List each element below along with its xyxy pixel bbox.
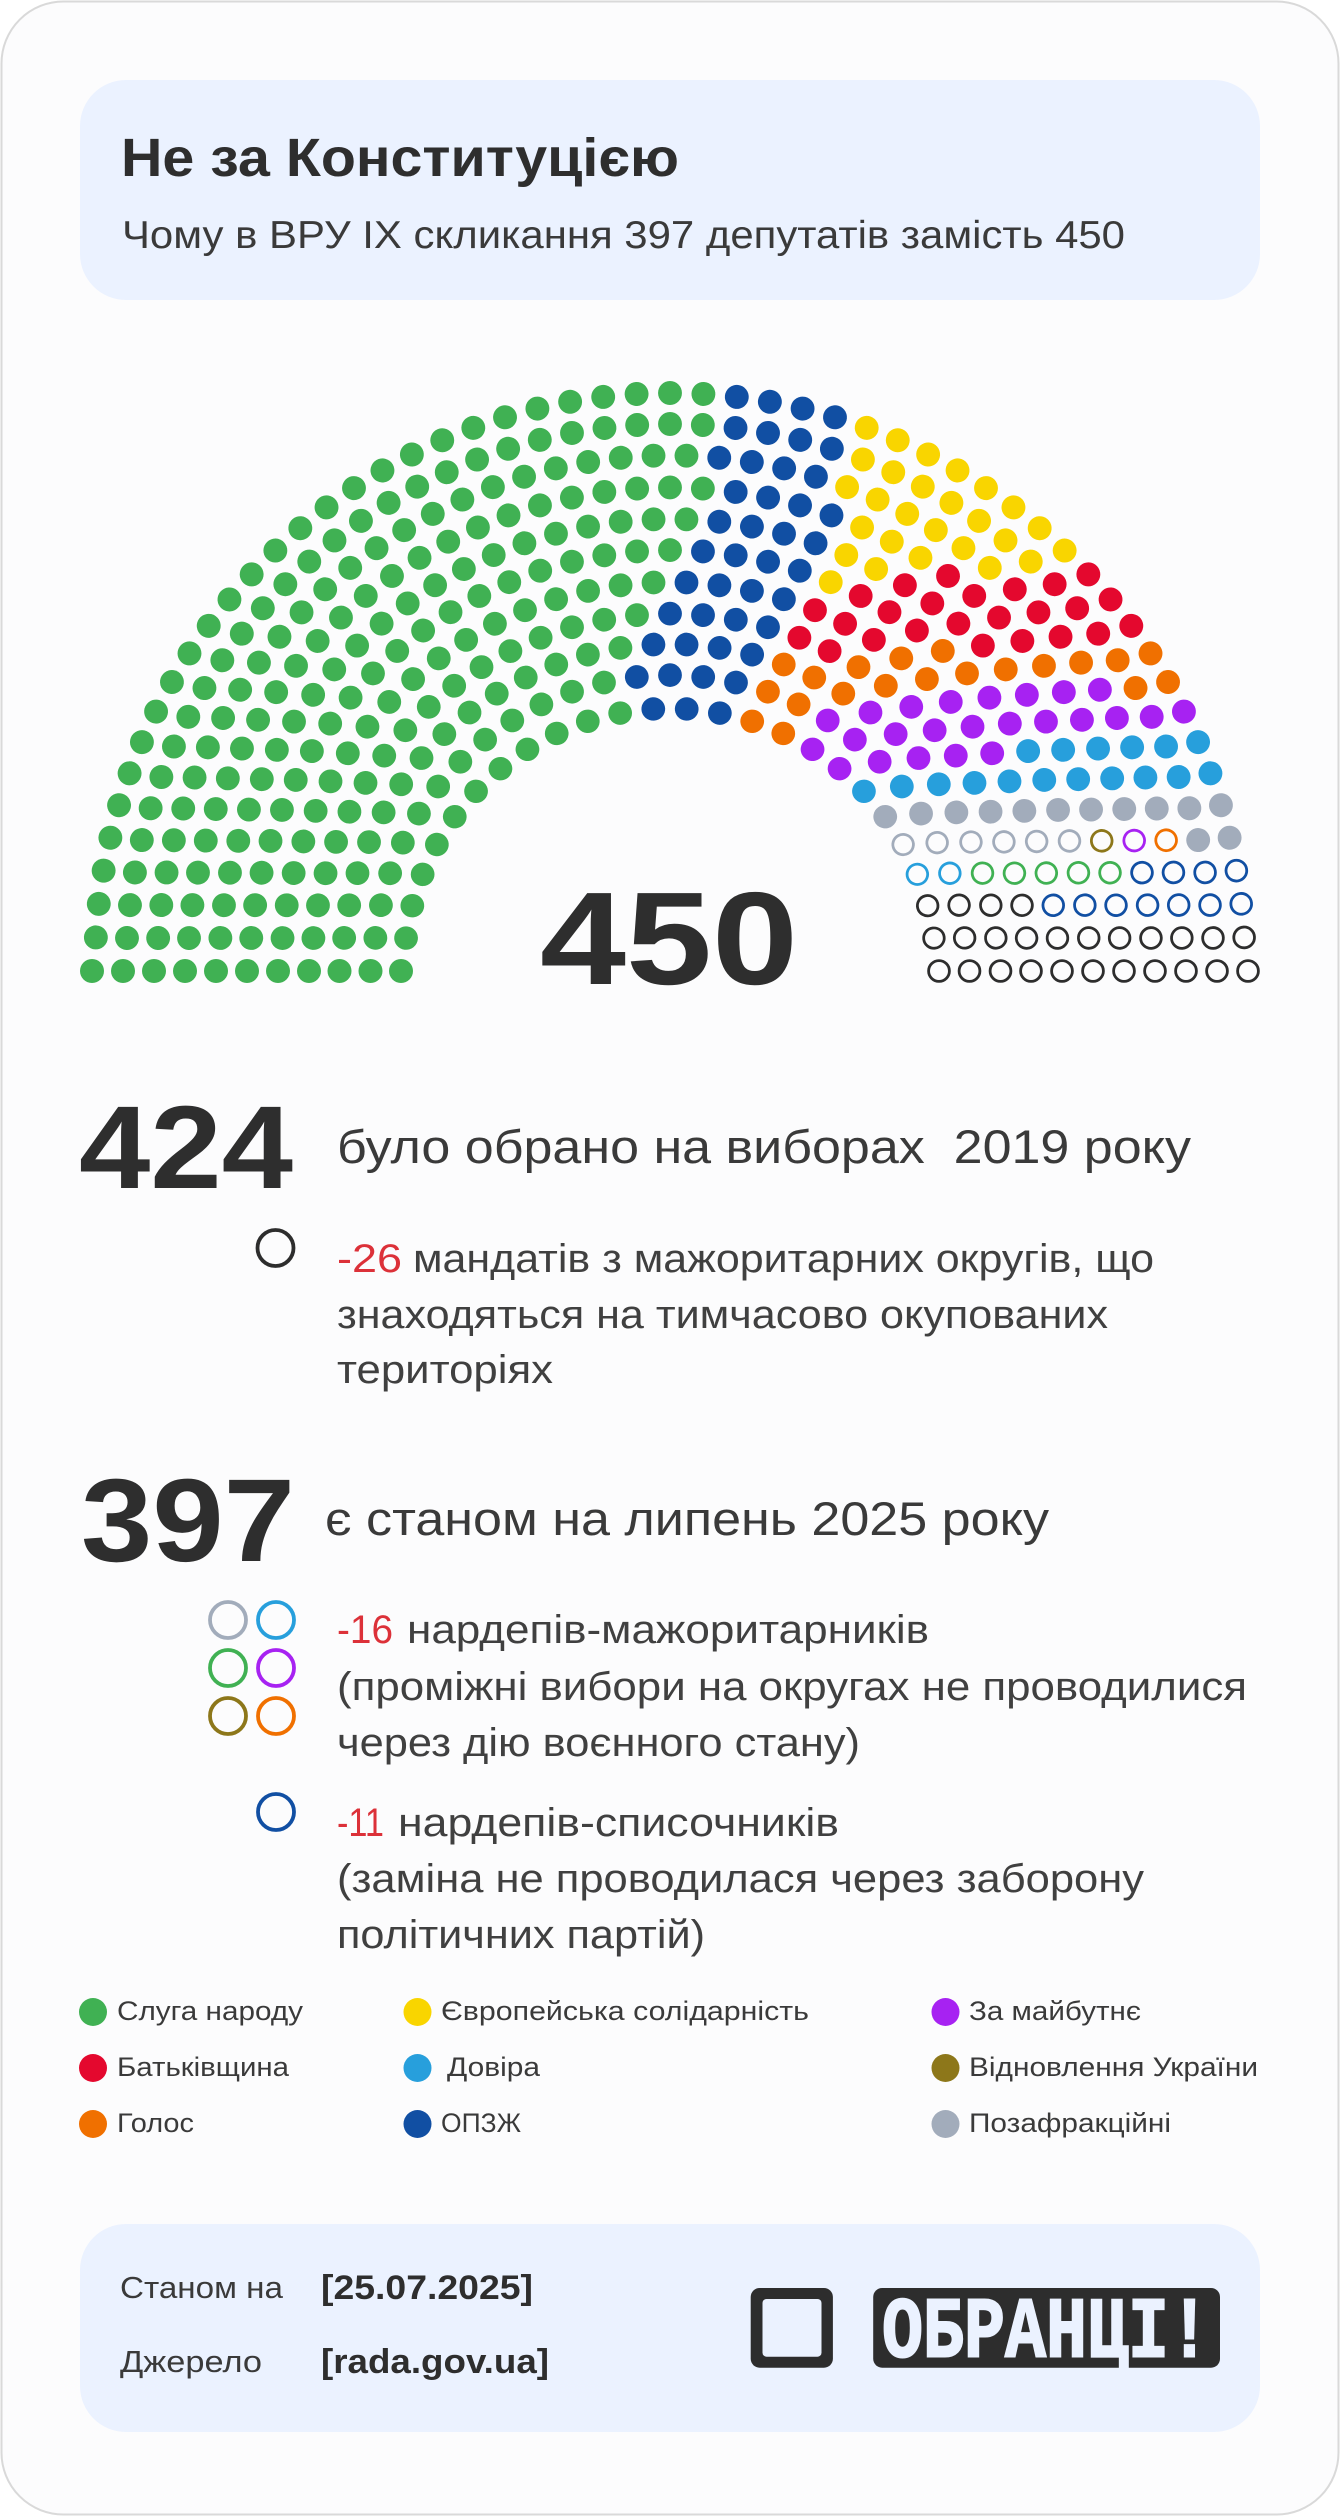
legend item: Голос	[79, 2108, 194, 2138]
vacant seats: нардепи-списочники	[1041, 859, 1253, 917]
note: minus 11: нардепів-списочників	[398, 1801, 839, 1845]
seats: Слуга народу	[80, 381, 716, 983]
section: 424 elected	[79, 1082, 1192, 1392]
note: minus 16: через дію воєнного стану)	[337, 1721, 860, 1765]
seats: За майбутнє	[796, 673, 1200, 785]
legend item: Батьківщина: Батьківщина	[117, 2052, 290, 2082]
footer: date label: Станом на	[120, 2270, 284, 2305]
vacant seat: За майбутнє	[1121, 828, 1147, 853]
legend item: ОПЗЖ: ОПЗЖ	[441, 2108, 521, 2138]
legend item: Позафракційні: Позафракційні	[969, 2108, 1171, 2138]
heading 397: є станом на липень 2025 року	[325, 1492, 1050, 1545]
vacant seats: Слуга народу	[970, 860, 1122, 886]
seats: Голос	[737, 634, 1184, 749]
footer: source value: [rada.gov.ua]	[321, 2343, 549, 2381]
logo: square mark	[751, 2288, 833, 2368]
note: minus 16: нардепів-мажоритарників	[407, 1608, 929, 1652]
vacant seats: позафракційні	[889, 828, 1082, 858]
vacant seat: Голос	[1154, 828, 1179, 853]
footer: source label: Джерело	[120, 2344, 262, 2379]
number 397: 397	[81, 1455, 295, 1587]
number 424: 424	[79, 1082, 293, 1214]
title: Не за Конституцією	[121, 128, 679, 188]
seats: Довіра	[847, 726, 1226, 808]
vacant seats: окуповані округи	[915, 893, 1258, 981]
legend item: Слуга народу: Слуга народу	[117, 1996, 304, 2026]
note: minus 26	[337, 1237, 1154, 1392]
legend item: ОПЗЖ	[404, 2108, 521, 2138]
parliament seat chart	[80, 381, 1258, 1012]
footer: date value: [25.07.2025]	[321, 2269, 533, 2307]
note: minus 26: територіях	[337, 1348, 553, 1392]
note: minus 11	[337, 1801, 1144, 1957]
note: minus 16	[337, 1608, 1247, 1765]
heading 424: було обрано на виборах 2019 року	[337, 1120, 1192, 1173]
note: minus 26: знаходяться на тимчасово окупованих	[337, 1293, 1108, 1337]
icon: black ring	[258, 1230, 294, 1266]
note: minus 16: (проміжні вибори на округах не проводилися	[337, 1665, 1247, 1709]
footer panel	[80, 2224, 1260, 2432]
seats: Батьківщина	[784, 557, 1148, 667]
vacant seats: Довіра	[904, 860, 963, 888]
section: 397 current	[81, 1455, 1247, 1957]
legend item: Довіра: Довіра	[447, 2052, 541, 2082]
seats: Європейська солідарність	[815, 412, 1082, 598]
total seats number: 450	[540, 865, 798, 1012]
legend item: Європейська солідарність: Європейська солідарність	[441, 1996, 809, 2026]
note: minus 26: мандатів з мажоритарних округів, що	[413, 1237, 1154, 1281]
vacant seat: Відновлення України	[1089, 828, 1115, 854]
note: minus 11: політичних партій)	[337, 1913, 705, 1957]
legend item: За майбутнє: За майбутнє	[969, 1996, 1141, 2026]
legend item: Відновлення України: Відновлення України	[969, 2052, 1258, 2082]
icon: blue ring	[258, 1794, 294, 1830]
logo: wordmark: ОБРАНЦІ!	[882, 2284, 1210, 2382]
note: minus 11: (заміна не проводилася через заборону	[337, 1857, 1144, 1901]
note: minus 11: -11	[337, 1801, 384, 1845]
note: minus 26: -26	[337, 1237, 402, 1281]
note: minus 16: -16	[337, 1608, 393, 1652]
header panel	[80, 80, 1260, 300]
legend item: Довіра	[404, 2052, 541, 2082]
seats: Позафракційні	[869, 790, 1244, 855]
legend item: Голос: Голос	[117, 2108, 194, 2138]
icons: six coloured rings	[210, 1602, 294, 1734]
seats: ОПЗЖ	[624, 384, 850, 727]
legend	[79, 1996, 1258, 2138]
subtitle: Чому в ВРУ ІХ скликання 397 депутатів замість 450	[122, 214, 1125, 257]
